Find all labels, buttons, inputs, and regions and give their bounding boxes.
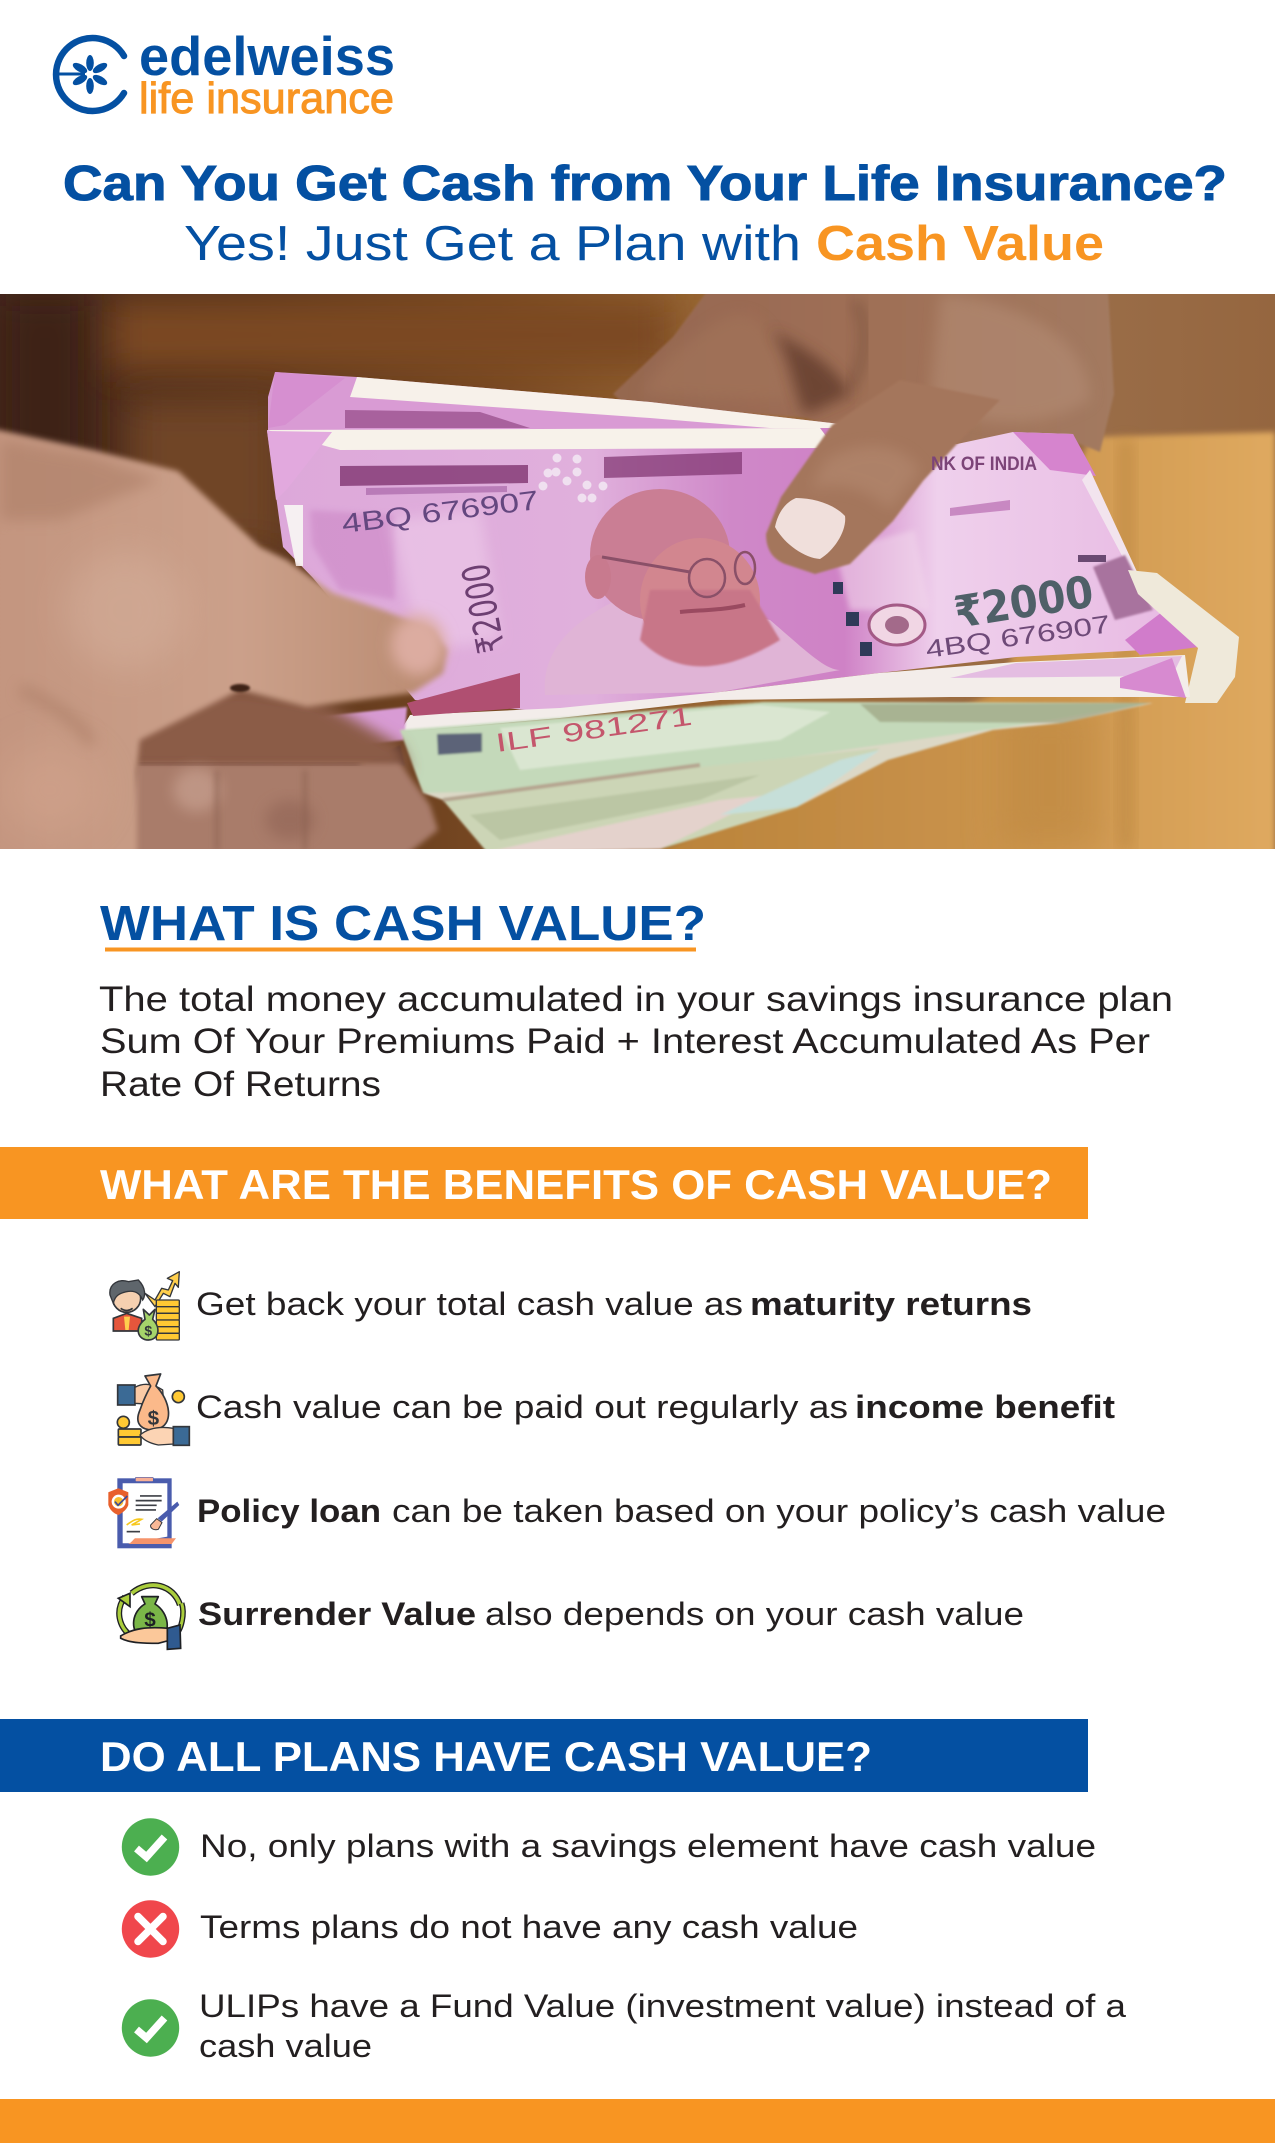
heading: WHAT IS CASH VALUE? bbox=[100, 897, 706, 951]
icon: hands exchanging money bag bbox=[117, 1374, 189, 1445]
icon: investor with rising coins bbox=[110, 1272, 179, 1340]
icon: green check bbox=[122, 1818, 179, 1876]
logo mark bbox=[56, 38, 124, 111]
benefit: policy loan bbox=[197, 1493, 1166, 1529]
statement: ULIPs: ULIPs have a Fund Value (investment value) instead of a bbox=[199, 1988, 1126, 2024]
benefit: maturity returns: maturity returns bbox=[750, 1286, 1032, 1322]
banknote vertical denomination: ₹2000 bbox=[453, 560, 514, 657]
banner: benefits heading bbox=[0, 1147, 1088, 1219]
lower currency notes bbox=[400, 702, 1153, 852]
statement: savings element: No, only plans with a savings element have cash value bbox=[200, 1828, 1096, 1864]
left thumbnail bbox=[391, 615, 445, 675]
benefit: income benefit bbox=[196, 1389, 1115, 1425]
icon: money bag in hand with arrows: $ bbox=[144, 1609, 156, 1632]
benefit: maturity returns: Get back your total cash value as bbox=[196, 1286, 743, 1322]
statement: term plans: Terms plans do not have any cash value bbox=[200, 1909, 858, 1945]
right thumb bbox=[766, 380, 1000, 574]
left hand lower fingers bbox=[133, 691, 440, 849]
benefit: surrender value: also depends on your cash value bbox=[485, 1596, 1024, 1632]
logo: edelweiss life insurance bbox=[56, 25, 395, 123]
section: what is cash value bbox=[99, 897, 1173, 1104]
benefit: maturity returns bbox=[196, 1286, 1032, 1322]
portrait on banknote bbox=[607, 603, 840, 694]
footer bar bbox=[0, 2099, 1275, 2143]
statement: ULIPs: cash value bbox=[199, 2028, 372, 2064]
banknote serial: 4BQ 676907 bbox=[340, 485, 540, 539]
benefit: income benefit: Cash value can be paid out regularly as bbox=[196, 1389, 848, 1425]
logo wordmark: edelweiss bbox=[139, 25, 395, 87]
title bbox=[63, 157, 1227, 271]
title line two: Yes! Just Get a Plan with bbox=[184, 217, 801, 271]
icon: red cross bbox=[122, 1900, 179, 1958]
icon: hands exchanging money bag: $ bbox=[148, 1407, 160, 1430]
banknote printed details bbox=[340, 465, 528, 486]
icon: money bag in hand with arrows bbox=[118, 1585, 183, 1649]
back banknote bbox=[268, 372, 835, 430]
heading underline bbox=[105, 948, 696, 952]
benefit: policy loan: Policy loan bbox=[197, 1493, 381, 1529]
banner: do all plans have cash value bbox=[0, 1719, 1088, 1792]
photo: hands exchanging rupee notes bbox=[0, 290, 1275, 860]
icon: signed policy document bbox=[108, 1477, 179, 1548]
bottom banknote edges bbox=[1128, 570, 1239, 703]
title highlight: Cash Value bbox=[816, 217, 1104, 271]
logo tagline: life insurance bbox=[139, 74, 394, 123]
left hand bbox=[0, 428, 447, 860]
description text: Rate Of Returns bbox=[100, 1065, 381, 1104]
benefit: policy loan: can be taken based on your policy’s cash value bbox=[392, 1493, 1166, 1529]
statement: ULIPs bbox=[199, 1988, 1126, 2064]
currency serial: ILF 981271 bbox=[494, 701, 694, 758]
icon: investor with rising coins: $ bbox=[144, 1322, 152, 1338]
banknote bank name: NK OF INDIA bbox=[931, 454, 1037, 475]
right hand bbox=[613, 290, 1114, 452]
benefit: income benefit: income benefit bbox=[855, 1389, 1115, 1425]
banner: benefits heading: WHAT ARE THE BENEFITS OF CASH VALUE? bbox=[100, 1161, 1052, 1208]
banknote denomination: ₹2000 bbox=[951, 567, 1097, 639]
benefit: surrender value bbox=[198, 1596, 1024, 1632]
benefit: surrender value: Surrender Value bbox=[198, 1596, 476, 1632]
icon: green check bbox=[122, 1999, 179, 2057]
description text bbox=[99, 980, 1173, 1104]
thumbnail bbox=[775, 498, 845, 559]
banner: do all plans have cash value: DO ALL PLANS HAVE CASH VALUE? bbox=[100, 1733, 872, 1780]
banknote serial lower: 4BQ 676907 bbox=[924, 610, 1112, 664]
description text: Sum Of Your Premiums Paid + Interest Accumulated As Per bbox=[100, 1022, 1150, 1061]
front banknote bbox=[267, 428, 1198, 713]
description text: The total money accumulated in your savings insurance plan bbox=[99, 980, 1173, 1019]
title line one: Can You Get Cash from Your Life Insurance? bbox=[63, 157, 1227, 211]
